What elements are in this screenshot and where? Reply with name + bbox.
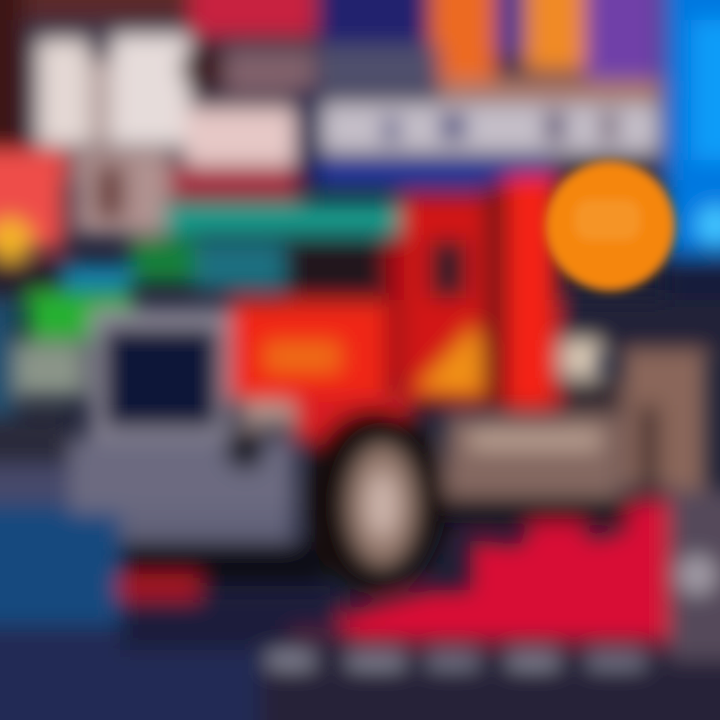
background: right blue glow <box>665 0 720 340</box>
title: white blocks left <box>38 35 315 235</box>
truck: chassis and rear <box>445 340 707 520</box>
background: lower area <box>0 300 720 720</box>
background: left side <box>0 150 80 505</box>
title: white block right <box>295 90 658 188</box>
orange badge <box>545 161 675 291</box>
background: top banner <box>0 0 720 180</box>
bar chart: red bars <box>290 498 668 642</box>
truck: cab roof and visor <box>15 203 405 397</box>
truck: grille <box>90 308 230 438</box>
truck: front wheel <box>303 408 447 592</box>
bar chart: axis labels <box>268 652 644 668</box>
truck: bumper <box>70 400 325 600</box>
truck: red cab <box>230 175 557 443</box>
